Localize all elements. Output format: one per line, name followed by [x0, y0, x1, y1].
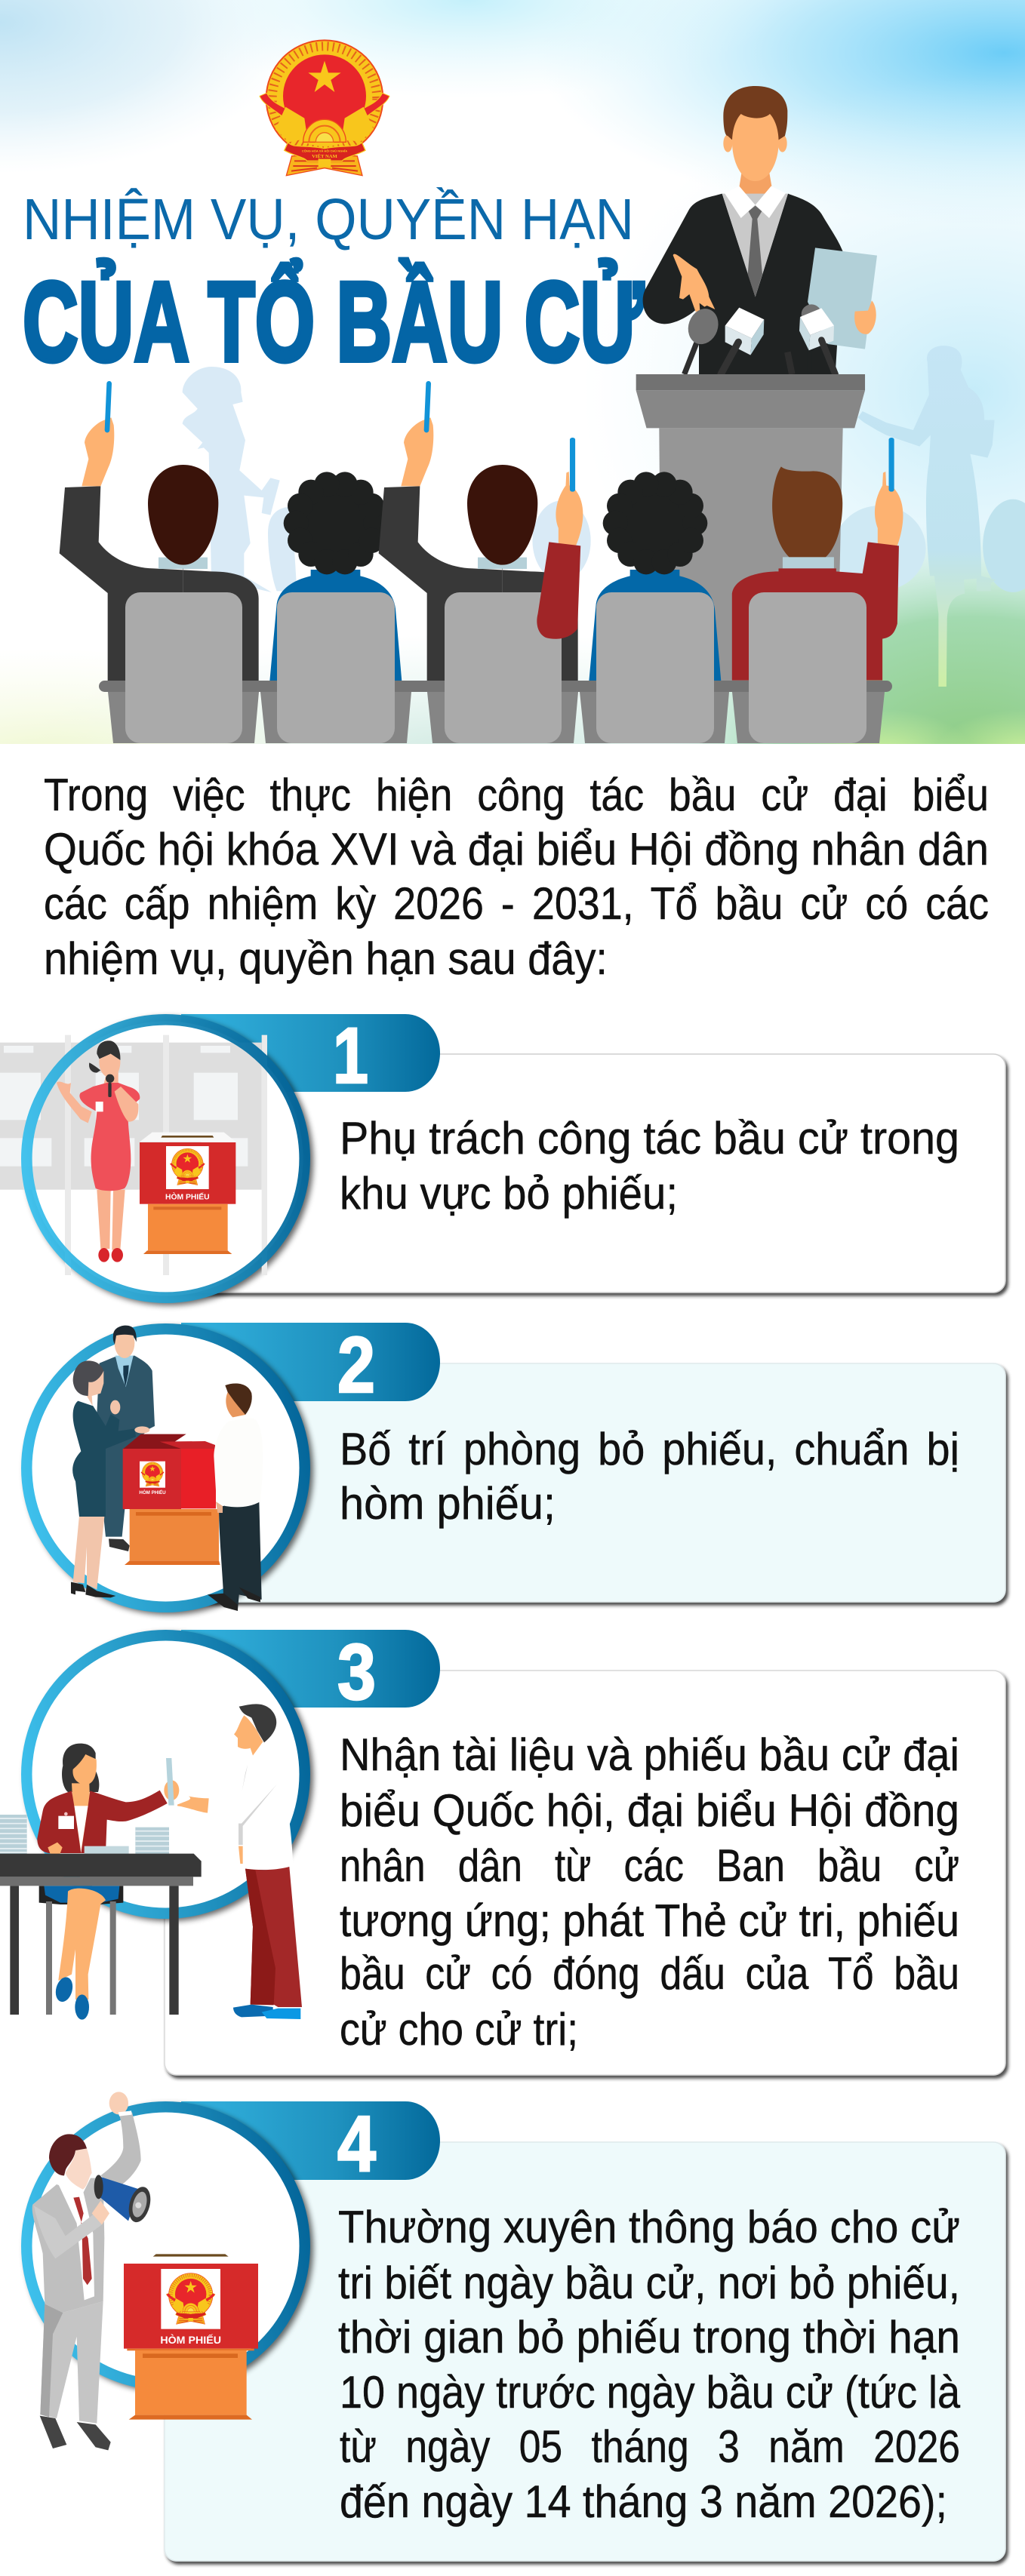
- emblem of Vietnam: CỘNG HÒA XÃ HỘI CHỦ NGHĨA: [302, 149, 347, 152]
- text 4: tri biết ngày bầu cử, nơi bỏ phiếu,: [338, 2258, 960, 2308]
- text 2: [340, 1424, 959, 1529]
- panel: step 2: [21, 1321, 1005, 1615]
- text 4: đến ngày 14 tháng 3 năm 2026);: [340, 2476, 947, 2527]
- text 4: [338, 2202, 961, 2527]
- ballot box: [124, 2254, 258, 2420]
- person: dark suit 2: [379, 383, 578, 681]
- circle frame with announcer and ballot box: [21, 2092, 313, 2450]
- seat rail: [99, 681, 892, 692]
- text 3: Nhận tài liệu và phiếu bầu cử đại: [340, 1729, 959, 1780]
- voting room background: [0, 1035, 267, 1275]
- person: dark suit 1: [60, 383, 259, 681]
- ballot box: HÒM PHIẾU: [160, 2333, 221, 2346]
- text 1: [340, 1113, 959, 1219]
- intro text: [44, 770, 989, 984]
- number tab 3: [181, 1628, 440, 1717]
- title: NHIỆM VỤ, QUYỀN HẠN: [23, 186, 634, 252]
- circle frame with woman and ballot box: [0, 1017, 313, 1305]
- emblem of Vietnam: VIỆT NAM: [312, 153, 338, 159]
- card 3: [165, 1671, 1005, 2075]
- background silhouette: woman at left: [183, 367, 297, 592]
- text 2: hòm phiếu;: [340, 1478, 556, 1529]
- woman in dress: [71, 1360, 149, 1597]
- standing voter: [177, 1704, 302, 2019]
- man with megaphone: [32, 2092, 141, 2450]
- text 4: thời gian bỏ phiếu trong thời hạn: [338, 2312, 960, 2362]
- table with paper stacks: [0, 1815, 202, 2015]
- text 1: khu vực bỏ phiếu;: [340, 1168, 678, 1219]
- text 3: [340, 1729, 959, 2055]
- number tab 3: 3: [337, 1628, 376, 1717]
- raised red sleeve with ballot: [537, 438, 583, 639]
- person: curly hair 2: [589, 472, 721, 681]
- woman with microphone: [57, 1041, 140, 1262]
- ballot box: [140, 1133, 236, 1254]
- intro text: Quốc hội khóa XVI và đại biểu Hội đồng nhân dân: [44, 824, 989, 875]
- person: red jacket with brown hair: [732, 438, 903, 681]
- panel: step 3: [0, 1628, 1005, 2075]
- number tab 2: [181, 1321, 440, 1409]
- card 4: [165, 2142, 1005, 2561]
- text 2: Bố trí phòng bỏ phiếu, chuẩn bị: [340, 1424, 959, 1474]
- title: CỦA TỔ BẦU CỬ: [23, 258, 644, 385]
- ballot box: HÒM PHIẾU: [139, 1488, 166, 1495]
- panel: step 1: [0, 1012, 1005, 1305]
- card 1: [165, 1054, 1005, 1293]
- number tab 1: 1: [333, 1012, 368, 1100]
- background silhouette: woman at right: [532, 346, 1025, 687]
- panel: header sky background: [0, 0, 1025, 744]
- text 3: biểu Quốc hội, đại biểu Hội đồng: [340, 1785, 959, 1836]
- circle frame with officer and voter: [0, 1630, 313, 2020]
- podium: [636, 374, 865, 689]
- text 1: Phụ trách công tác bầu cử trong: [340, 1113, 959, 1164]
- speaker at podium: [636, 86, 877, 689]
- panel: step 4: [21, 2092, 1005, 2561]
- number tab 2: 2: [337, 1321, 375, 1409]
- number tab 4: [181, 2100, 440, 2188]
- person: curly hair 1: [269, 472, 402, 681]
- card 2: [165, 1363, 1005, 1602]
- text 3: cử cho cử tri;: [340, 2004, 578, 2055]
- ballot box: [123, 1434, 220, 1565]
- man in white shirt: [208, 1383, 263, 1611]
- icon: megaphone: [94, 2175, 154, 2224]
- audience seated with raised ballots: [60, 383, 903, 743]
- text 3: tương ứng; phát Thẻ cử tri, phiếu: [340, 1895, 959, 1946]
- text 4: 10 ngày trước ngày bầu cử (tức là: [340, 2367, 961, 2418]
- circle frame with three people and ballot box: [21, 1323, 313, 1615]
- title: [23, 186, 644, 385]
- man in suit: [96, 1326, 155, 1551]
- intro text: nhiệm vụ, quyền hạn sau đây:: [44, 933, 608, 984]
- number tab 1: [181, 1012, 440, 1100]
- emblem of Vietnam: [260, 40, 389, 176]
- text 4: Thường xuyên thông báo cho cử: [338, 2202, 960, 2252]
- ballot box: HÒM PHIẾU: [165, 1192, 210, 1202]
- seated woman officer: [37, 1744, 179, 2020]
- seat row: [108, 592, 885, 743]
- speaker figure: [643, 86, 877, 374]
- number tab 4: 4: [337, 2100, 376, 2188]
